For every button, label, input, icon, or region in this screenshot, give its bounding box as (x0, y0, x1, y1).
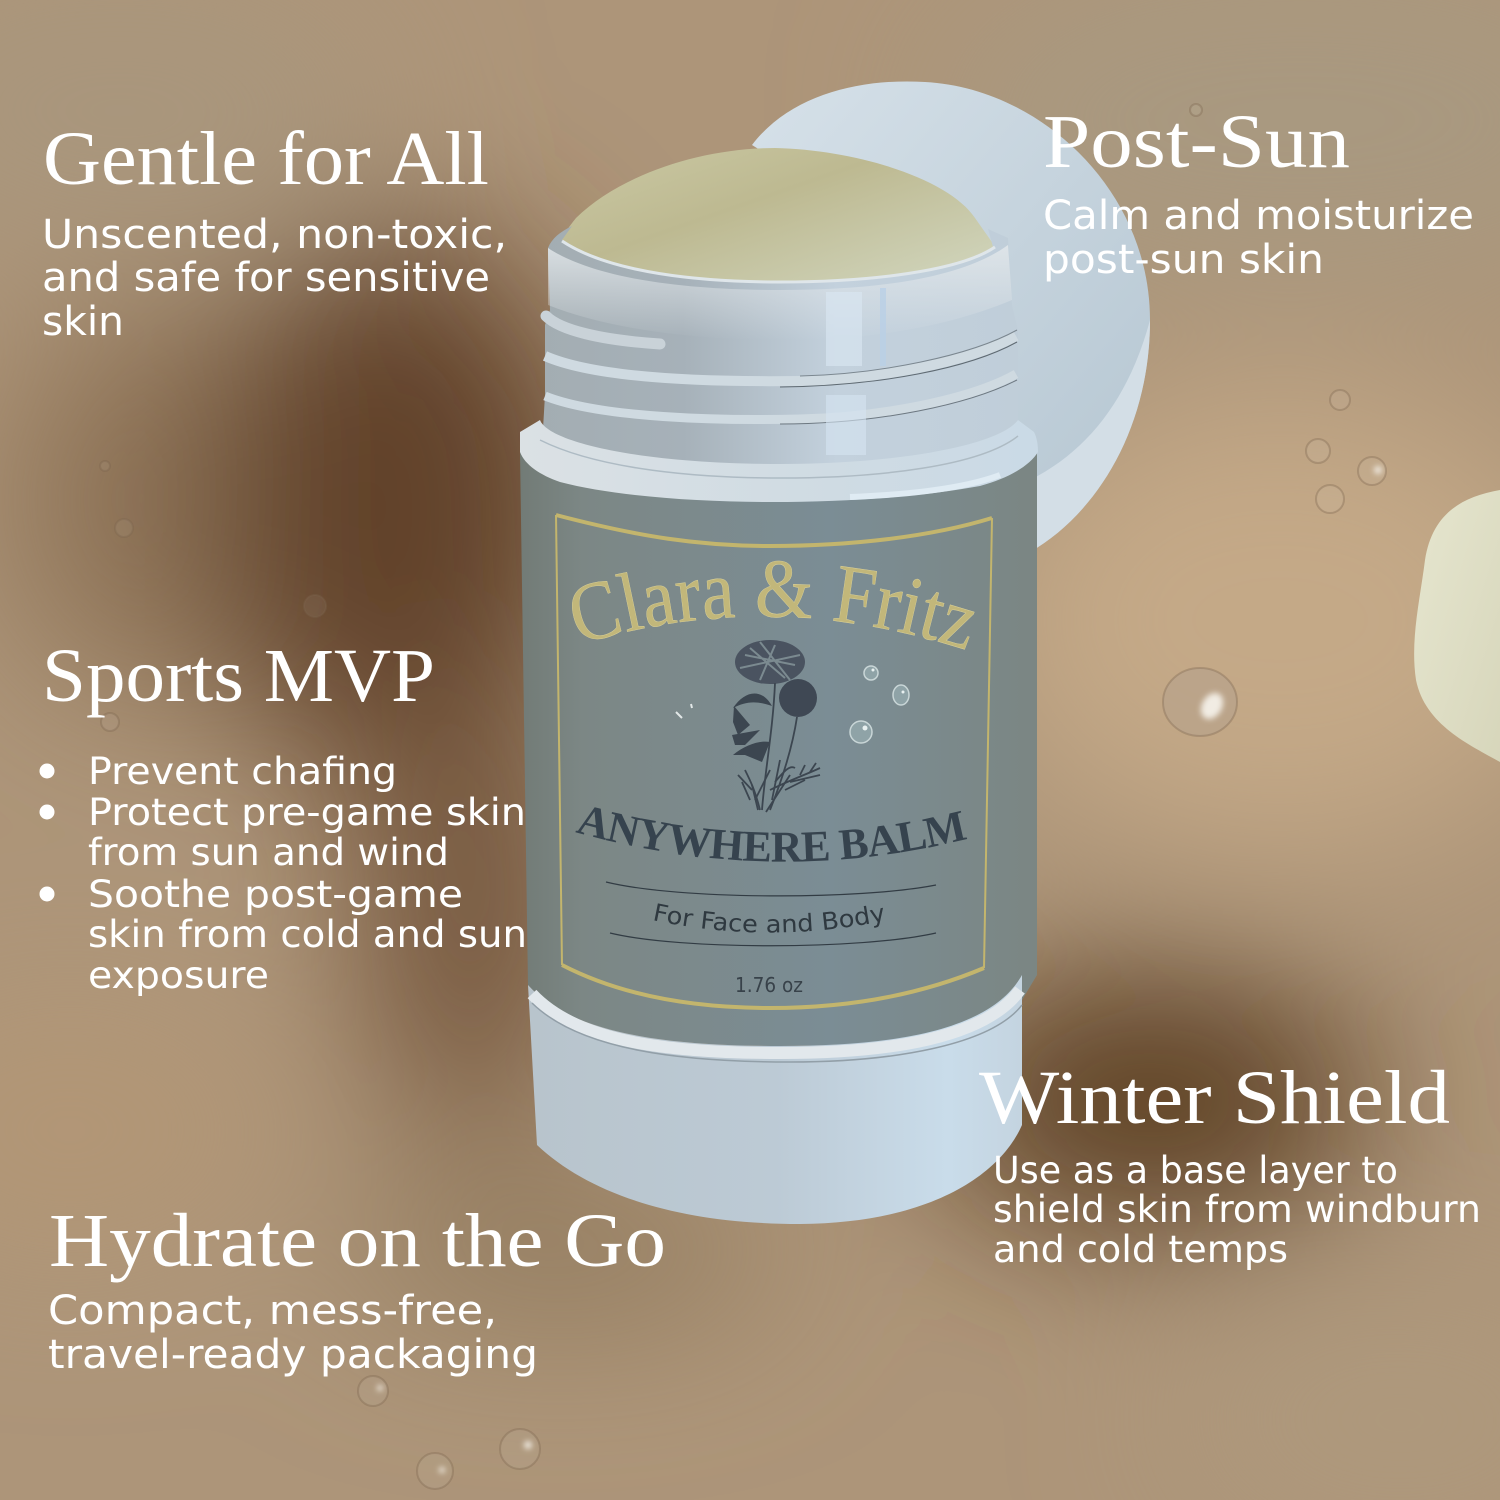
gold label border (556, 515, 992, 1008)
callout: Winter Shield (979, 1056, 1481, 1271)
callout: Post-Sun (1043, 100, 1474, 283)
ornamental rules (606, 882, 936, 946)
callout: Hydrate on the Go (48, 1199, 666, 1378)
heading: Sports MVP (42, 634, 435, 718)
text block: Unscented, non-toxic, (42, 212, 507, 258)
bullet list: exposure (88, 954, 269, 997)
text block: and cold temps (993, 1228, 1288, 1271)
text block: Use as a base layer to (993, 1149, 1398, 1192)
heading: Gentle for All (43, 117, 489, 201)
heading: Hydrate on the Go (49, 1199, 666, 1283)
text block: shield skin from windburn (993, 1188, 1481, 1231)
bullet list: skin from cold and sun (88, 913, 527, 956)
net weight: 1.76 oz (735, 973, 803, 997)
brand name: Clara & Fritz (572, 560, 974, 650)
threads (546, 316, 660, 344)
heading: Post-Sun (1043, 100, 1350, 184)
stick collar and threads (540, 226, 1018, 480)
text block: travel-ready packaging (48, 1332, 538, 1378)
small glints (676, 704, 692, 718)
white cap behind the stick (752, 81, 1150, 552)
bullet list: Soothe post-game (88, 873, 463, 916)
icon: droplets on label (850, 666, 909, 743)
droplet highlights (377, 466, 1382, 1473)
balm dome (558, 148, 994, 300)
bullet list: Prevent chafing (88, 750, 397, 793)
callout: Gentle for All (42, 117, 507, 345)
bottom base (528, 975, 1022, 1224)
bottle body with label background (520, 420, 1038, 1046)
text block: post-sun skin (1043, 237, 1324, 283)
bullet dots (40, 764, 54, 902)
text block: and safe for sensitive (42, 255, 490, 301)
bullet list: from sun and wind (88, 831, 449, 874)
highlights (826, 292, 862, 366)
text block: Compact, mess-free, (48, 1288, 497, 1334)
icon: botanical illustration (732, 640, 820, 812)
text block: Calm and moisturize (1043, 193, 1474, 239)
water droplets (100, 104, 1386, 1489)
callout: Sports MVP (40, 634, 527, 997)
heading: Winter Shield (979, 1056, 1450, 1140)
text block: skin (42, 299, 124, 345)
bullet list: Protect pre-game skin (88, 791, 526, 834)
descriptor: For Face and Body (654, 903, 883, 933)
product name: ANYWHERE BALM (576, 807, 968, 862)
product label (555, 513, 993, 1010)
balm smear, right edge (1414, 490, 1500, 762)
